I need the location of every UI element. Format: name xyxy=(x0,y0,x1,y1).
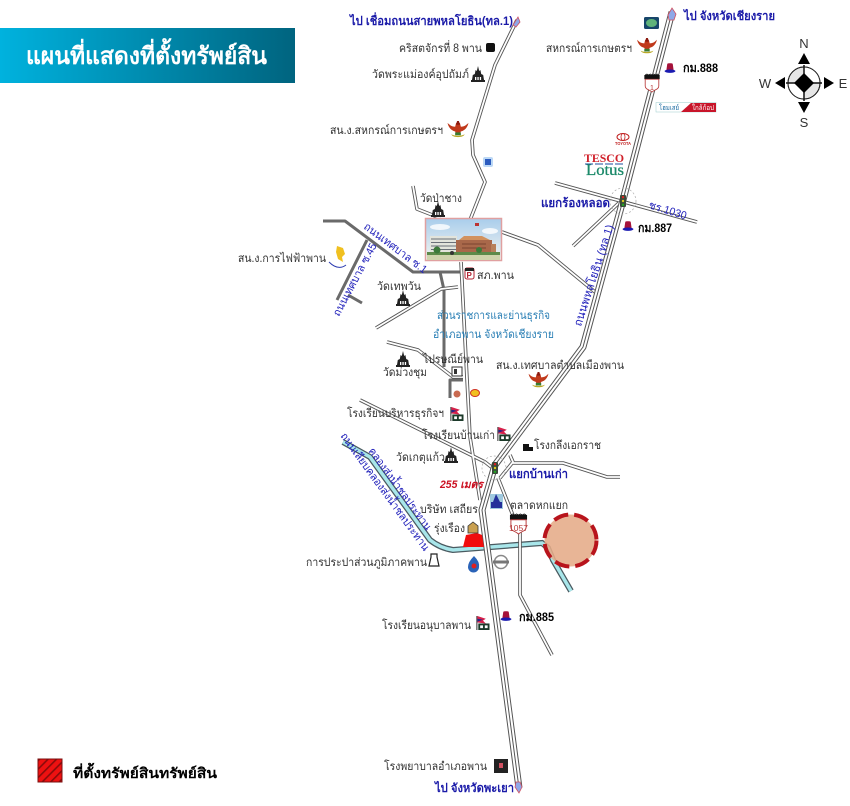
kindergarten xyxy=(382,616,490,632)
logo: Tesco Lotus: TESCO xyxy=(584,151,624,165)
junction: Ban Kao: แยกบ้านเก่า xyxy=(509,467,568,481)
government building photo xyxy=(426,218,502,260)
km 887 xyxy=(623,221,672,235)
canal label: คลองส่งน้ำชลประทาน xyxy=(366,444,436,533)
fuel icons xyxy=(454,390,480,398)
machine shop xyxy=(523,438,601,452)
Sathian Rungrueang company xyxy=(420,503,478,535)
logo: Tesco Lotus: Lotus xyxy=(586,162,624,179)
label: agricultural coop: สหกรณ์การเกษตรฯ xyxy=(546,41,632,55)
legend: ที่ตั้งทรัพย์สินทรัพย์สิน xyxy=(73,762,217,781)
temple Muang Chum: วัดม่วงชุม xyxy=(383,367,427,379)
label: temple Mae Ong: วัดพระแม่องค์อุปถัมภ์ xyxy=(372,67,469,81)
temple Pa Chang xyxy=(420,193,462,217)
temple Thep Wan xyxy=(377,281,421,306)
label: agricultural coop office xyxy=(330,121,468,137)
Ban Kao school: โรงเรียนบ้านเก่า xyxy=(422,428,495,442)
junction: Rong Lot xyxy=(541,188,636,214)
legend xyxy=(38,759,217,782)
route 1057 shield xyxy=(509,514,528,534)
label: to Phayao: ไป จังหวัดพะเยา xyxy=(433,780,514,795)
compass: W xyxy=(759,76,772,91)
municipal office xyxy=(496,359,624,387)
label: church: คริสตจักรที่ 8 พาน xyxy=(399,40,482,55)
police station: สภ.พาน xyxy=(477,270,514,282)
compass xyxy=(759,36,848,130)
temple Pa Chang: วัดป่าชาง xyxy=(420,193,462,205)
end arrows xyxy=(513,8,676,793)
logo: Homesite xyxy=(656,102,716,112)
km 885 xyxy=(501,610,554,624)
district label xyxy=(433,309,554,341)
logo: Toyota xyxy=(615,134,632,146)
logo: Homesite: โฮมเสย์ xyxy=(659,103,679,112)
logo: Toyota: TOYOTA xyxy=(615,141,632,146)
police station: P xyxy=(466,271,472,280)
temple Ket Kaeo xyxy=(396,447,458,464)
km 887: กม.887 xyxy=(638,221,672,235)
junction: Rong Lot: แยกร้องหลอด xyxy=(541,196,610,210)
police station xyxy=(465,268,514,282)
temple Thep Wan: วัดเทพวัน xyxy=(377,281,421,293)
compass: E xyxy=(839,76,848,91)
icon: small bank xyxy=(483,157,493,167)
temple Ket Kaeo: วัดเกตุแก้ว xyxy=(396,451,445,464)
district label: ส่วนราชการและย่านธุรกิจ xyxy=(437,309,550,322)
banner title xyxy=(0,28,295,83)
highway 1 shield: 1 xyxy=(650,85,654,92)
label: temple Mae Ong xyxy=(372,66,485,82)
road label: Phahonyothin: ถนนพหลโยธิน (ทล.1) xyxy=(571,223,617,328)
machine shop: โรงกลึงเอกราช xyxy=(534,438,601,452)
road label: Thetsaban Soi 45: ถนนเทศบาล ซ.45 xyxy=(331,241,380,318)
waterworks: การประปาส่วนภูมิภาคพาน xyxy=(306,556,427,569)
district label: อำเภอพาน จังหวัดเชียงราย xyxy=(433,328,554,341)
road label: Thetsaban Soi 1: ถนนเทศบาล ซ.1 xyxy=(361,221,429,276)
junction: Ban Kao xyxy=(482,456,568,481)
electricity office xyxy=(238,246,346,267)
logo: Tesco Lotus xyxy=(584,151,624,179)
km 888 xyxy=(665,61,718,75)
road label: Chor Ror 1030: ชร.1030 xyxy=(647,199,688,222)
post office xyxy=(422,352,483,376)
compass: N xyxy=(799,36,809,51)
km 888: กม.888 xyxy=(683,61,718,75)
compass: S xyxy=(800,115,809,130)
PTT station logo xyxy=(468,556,479,572)
logo: Homesite: ใกล้ก้อป xyxy=(692,103,714,112)
highway 1 shield xyxy=(644,74,660,92)
post office: ไปรษณีย์พาน xyxy=(422,352,483,366)
banner title: แผนที่แสดงที่ตั้งทรัพย์สิน xyxy=(26,37,268,70)
temple Muang Chum xyxy=(383,351,427,379)
kindergarten: โรงเรียนอนุบาลพาน xyxy=(382,618,471,632)
label: to highway: ไป เชื่อมถนนสายพหลโยธิน(ทล.1) xyxy=(348,12,513,28)
km 885: กม.885 xyxy=(519,610,554,624)
label: agricultural coop office: สน.ง.สหกรณ์การเกษตรฯ xyxy=(330,123,443,137)
road label: canal road: ถนนเลียบคลองส่งน้ำชลประทาน xyxy=(338,429,434,554)
icon: bank leaf xyxy=(644,17,659,29)
canal xyxy=(343,442,571,591)
Sathian Rungrueang company: รุ่งเรือง xyxy=(434,522,465,535)
market: ตลาดหกแยก xyxy=(510,500,568,512)
highway 1 xyxy=(482,12,672,788)
label: to Chiang Rai: ไป จังหวัดเชียงราย xyxy=(682,8,775,23)
market xyxy=(490,494,568,512)
distance label: 255 เมตร xyxy=(439,479,485,491)
hospital: โรงพยาบาลอำเภอพาน xyxy=(384,759,487,773)
municipal office: สน.ง.เทศบาลตำบลเมืองพาน xyxy=(496,359,624,372)
subject location circle xyxy=(544,514,596,566)
business school: โรงเรียนบริหารธุรกิจฯ xyxy=(347,406,444,420)
electricity office: สน.ง.การไฟฟ้าพาน xyxy=(238,252,326,265)
subject parcel xyxy=(463,533,484,547)
secondary roads xyxy=(323,20,697,655)
label: agricultural coop xyxy=(546,38,657,55)
route 1057 shield: 1057 xyxy=(509,523,528,533)
Sathian Rungrueang company: บริษัท เสถียร xyxy=(420,503,478,516)
Nissan logo xyxy=(493,556,509,568)
